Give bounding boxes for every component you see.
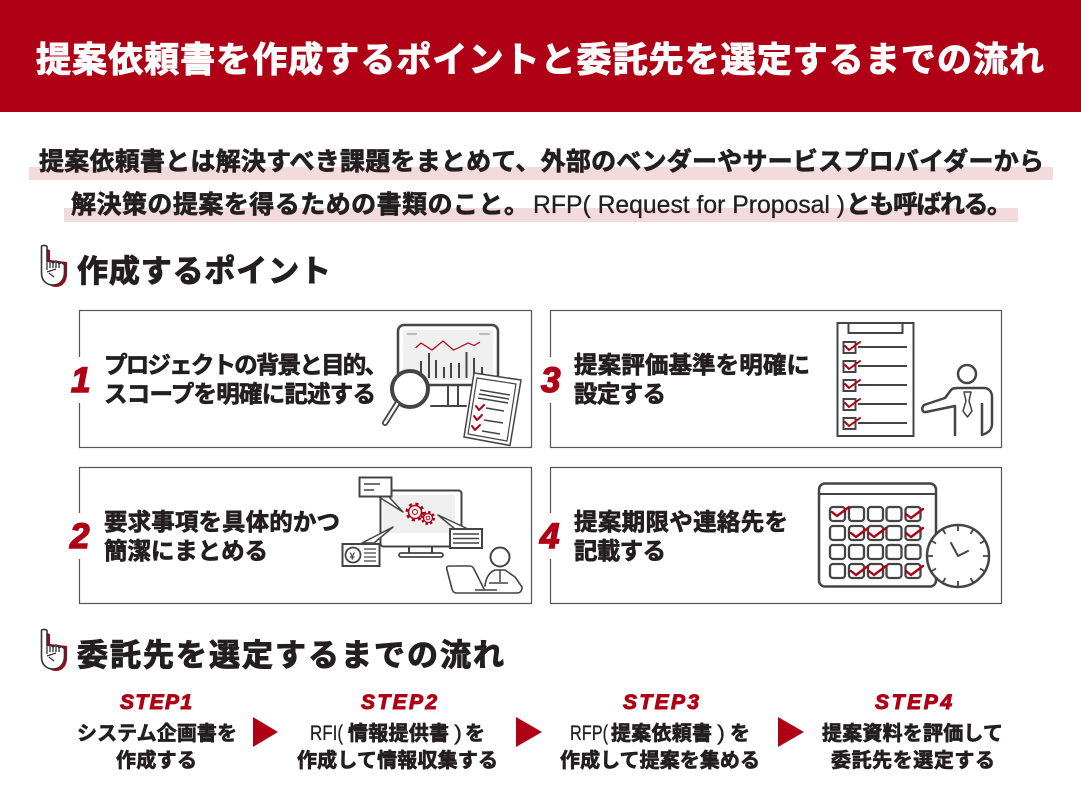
step 3: RFP( <box>570 722 608 745</box>
icon: calendar and clock <box>819 484 989 587</box>
icon: monitor, gears, speech bubbles and person <box>342 478 522 593</box>
title banner <box>0 0 1081 112</box>
intro text block: 解決策の提案を得るための書類のこと。 <box>71 191 529 219</box>
step 4 <box>822 691 1003 772</box>
panel: point 1: スコープを明確に記述する <box>104 381 376 407</box>
step 1: システム企画書を <box>77 722 237 745</box>
intro text block: とも呼ばれる。 <box>846 191 1012 219</box>
step 3: 提案依頼書 <box>611 722 712 745</box>
step 4: 提案資料を評価して <box>822 722 1003 745</box>
icon: clipboard and person <box>838 323 992 436</box>
panel: point 1: 1 <box>71 361 90 400</box>
icon: monitor, magnifier and checklist <box>385 325 521 446</box>
panel: point 1: プロジェクトの背景と目的、 <box>104 352 388 378</box>
panel: point 2: 2 <box>69 517 90 556</box>
step 2: RFI( <box>310 722 343 745</box>
arrow 3 <box>778 717 804 747</box>
step 3: STEP3 <box>623 691 699 714</box>
panel: point 2 <box>69 468 532 604</box>
intro text block: RFP( Request for Proposal ) <box>533 191 845 219</box>
step 2: STEP2 <box>361 691 437 714</box>
step 2 <box>297 691 498 772</box>
step 1 <box>77 691 237 772</box>
panel: point 1 <box>71 310 532 448</box>
step 3: ) <box>717 722 725 745</box>
panel: point 2: 要求事項を具体的かつ <box>104 509 340 535</box>
step 2: 作成して情報収集する <box>297 748 498 772</box>
arrow 1 <box>253 717 278 747</box>
step 1: STEP1 <box>120 691 192 714</box>
step 2: 情報提供書 <box>348 722 449 745</box>
panel: point 4: 4 <box>539 517 559 556</box>
icon: monitor, gears, speech bubbles and person: ¥ <box>350 552 356 562</box>
step 4: 委託先を選定する <box>831 749 995 772</box>
panel: point 4 <box>539 468 1002 604</box>
panel: point 3: 提案評価基準を明確に <box>574 352 810 378</box>
step 1: 作成する <box>116 748 197 772</box>
panel: point 3: 設定する <box>574 381 666 407</box>
icon: pointing hand <box>42 629 67 671</box>
panel: point 2: 簡潔にまとめる <box>104 538 268 564</box>
panel: point 3: 3 <box>541 361 561 400</box>
panel: point 4: 提案期限や連絡先を <box>574 509 788 535</box>
title banner: 提案依頼書を作成するポイントと委託先を選定するまでの流れ <box>36 41 1044 80</box>
step 3 <box>560 691 760 772</box>
step 3: を <box>730 722 750 745</box>
panel: point 4: 記載する <box>574 538 666 564</box>
intro text block: 提案依頼書とは解決すべき課題をまとめて、外部のベンダーやサービスプロバイダーから <box>39 147 1044 176</box>
arrow 2 <box>516 717 542 747</box>
step 3: 作成して提案を集める <box>560 748 760 772</box>
intro text block <box>29 147 1053 222</box>
icon: pointing hand <box>42 245 67 287</box>
heading: 委託先を選定するまでの流れ: 委託先を選定するまでの流れ <box>77 638 504 673</box>
step 2: ) <box>454 722 462 745</box>
panel: point 3 <box>541 310 1002 448</box>
step 2: を <box>465 722 485 745</box>
step 4: STEP4 <box>875 691 952 714</box>
heading: 作成するポイント: 作成するポイント <box>77 254 331 289</box>
